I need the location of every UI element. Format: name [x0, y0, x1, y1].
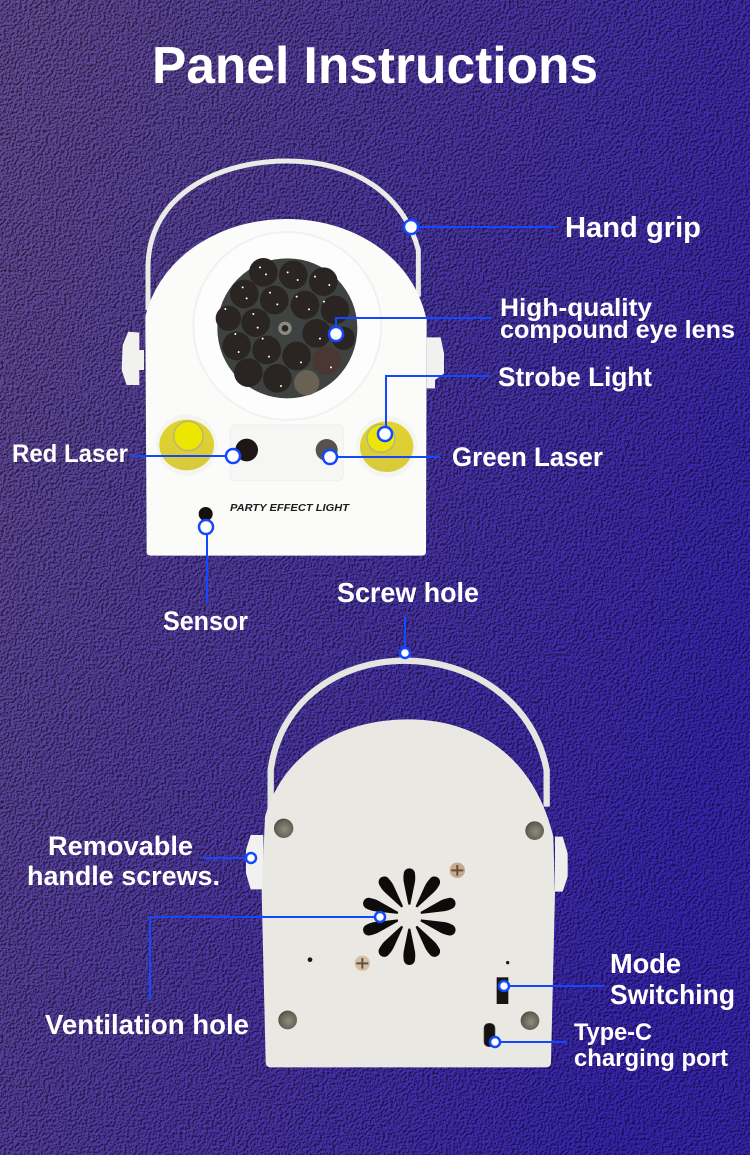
- callout: red laser: [12, 440, 240, 468]
- ventilation slots: [362, 868, 457, 965]
- pin holes: [308, 957, 509, 964]
- callout: red laser: Red Laser: [12, 440, 128, 468]
- red laser aperture: [235, 439, 258, 461]
- callout: strobe light: [378, 362, 652, 441]
- callout: Type-C charging port: Type-C: [574, 1019, 652, 1046]
- callout: compound eye lens: High-quality: [500, 294, 652, 322]
- back body: [262, 719, 555, 1067]
- callout: strobe light: Strobe Light: [498, 362, 652, 392]
- mounting holes: [274, 819, 544, 1030]
- callout: Type-C charging port: charging port: [574, 1045, 728, 1072]
- callout: compound eye lens: [329, 294, 735, 344]
- title: Panel Instructions: [152, 37, 598, 95]
- Type-C port: [484, 1023, 495, 1047]
- callout: sensor: Sensor: [163, 606, 248, 636]
- callout: mode switching: Mode: [610, 948, 681, 979]
- callout: ventilation hole: [45, 912, 385, 1040]
- product: back view: [246, 661, 568, 1067]
- callout: removable handle screws: Removable: [48, 831, 193, 861]
- callout: removable handle screws: handle screws.: [27, 861, 220, 891]
- left side knob: [246, 835, 263, 889]
- green laser aperture: [316, 439, 338, 461]
- laser panel: [230, 425, 343, 481]
- compound eye lens: [216, 258, 357, 398]
- product: front view: [122, 161, 444, 556]
- right side knob: [555, 837, 568, 892]
- front handle: [148, 161, 418, 310]
- callout: removable handle screws: [27, 831, 256, 891]
- screws: [355, 863, 465, 971]
- callout: mode switching: [499, 948, 735, 1010]
- left strobe light: [156, 414, 217, 476]
- back handle: [271, 661, 547, 817]
- callout: screw hole: [337, 577, 479, 658]
- callout: mode switching: Switching: [610, 979, 735, 1010]
- callout: hand grip: Hand grip: [565, 212, 701, 244]
- left knob: [122, 332, 144, 385]
- callout: compound eye lens: compound eye lens: [500, 316, 735, 344]
- callout: screw hole: Screw hole: [337, 577, 479, 608]
- sensor aperture: [199, 507, 213, 521]
- lens bezel: [193, 232, 381, 420]
- callout: sensor: [163, 520, 248, 636]
- callout: ventilation hole: Ventilation hole: [45, 1009, 249, 1040]
- right strobe light: [356, 416, 417, 477]
- callout: hand grip: [404, 212, 701, 244]
- callout: green laser: Green Laser: [452, 442, 603, 472]
- front body: [145, 219, 427, 556]
- right knob: [427, 337, 444, 388]
- mode switch: [497, 977, 508, 1004]
- callout: Type-C charging port: [490, 1019, 728, 1072]
- product label: PARTY EFFECT LIGHT: [230, 502, 351, 514]
- callout: green laser: [323, 442, 603, 472]
